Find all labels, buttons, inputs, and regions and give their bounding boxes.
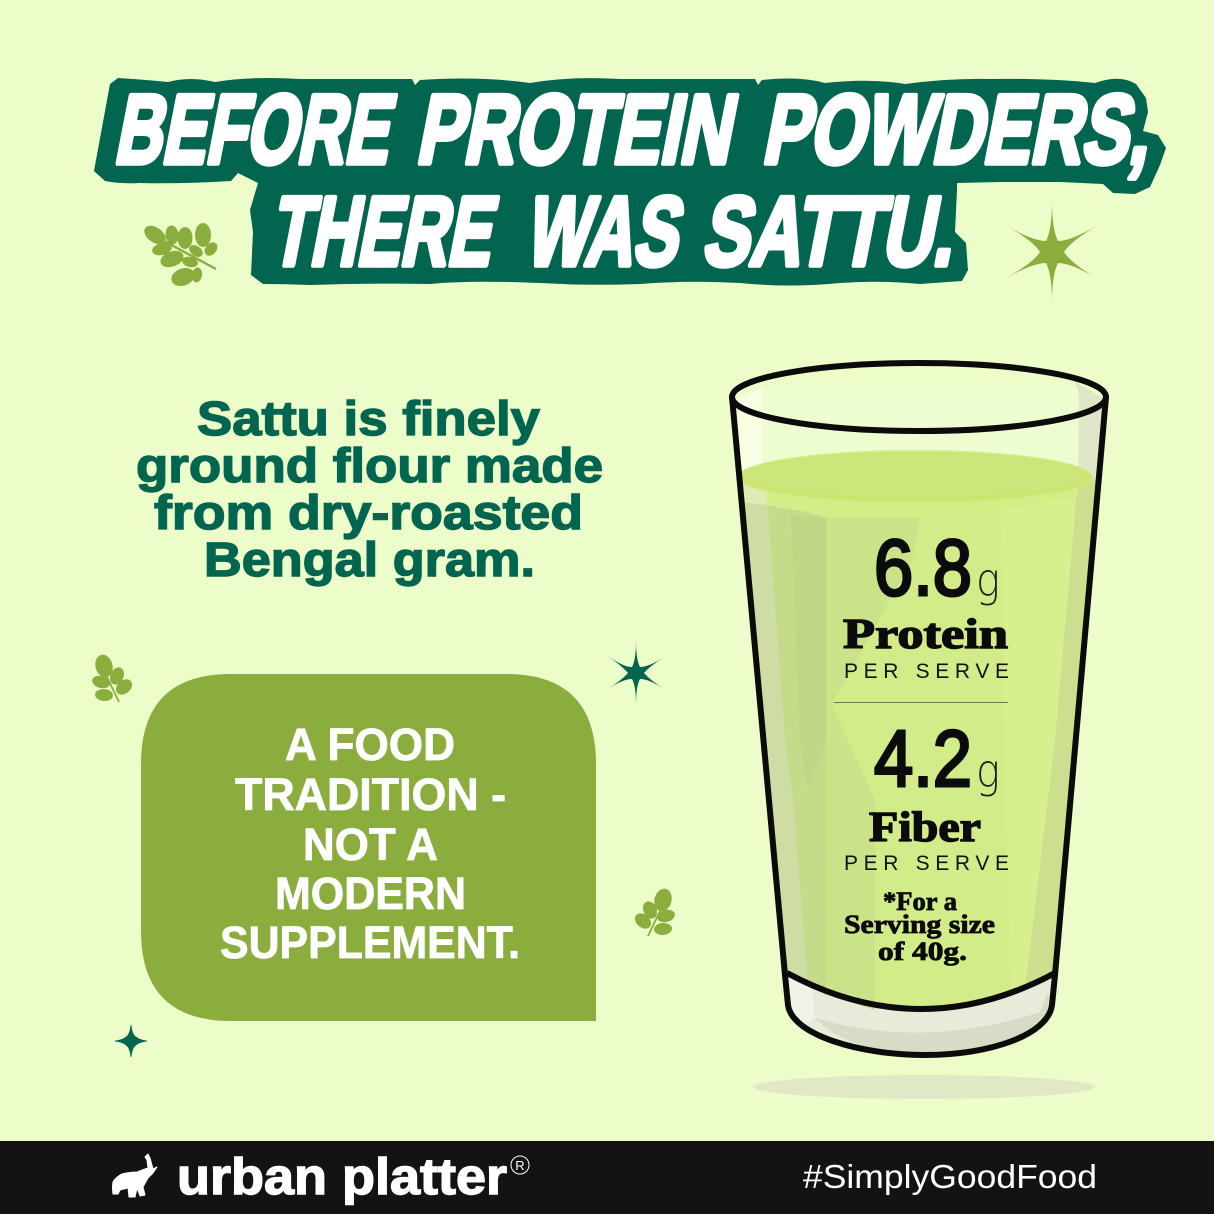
icon: leaf left (91, 653, 135, 702)
callout: A FOOD (285, 719, 455, 770)
title: THERE (265, 176, 506, 286)
liquid surface (737, 450, 1093, 504)
serving note (844, 887, 995, 966)
stat: fiber: Fiber (869, 805, 981, 851)
title: WAS (520, 176, 693, 286)
icon: six point dark sparkle (608, 640, 664, 705)
stat: protein: g (976, 553, 1000, 607)
intro text: ground flour made (136, 440, 603, 493)
icon: leaf sprig top (141, 222, 220, 289)
callout (141, 674, 596, 1021)
callout: NOT A (303, 819, 438, 870)
stat: protein (843, 523, 1009, 683)
logo wordmark: urban platter (177, 1148, 507, 1205)
registered mark (511, 1156, 529, 1174)
icon: leaf right (632, 887, 676, 936)
serving note: of 40g. (878, 937, 967, 966)
liquid body (740, 478, 1097, 1010)
intro text: Sattu is finely (197, 393, 540, 446)
footer bar (0, 1141, 1214, 1214)
stat: fiber: 4.2 (874, 714, 972, 803)
icon: elephant (112, 1154, 157, 1197)
registered mark: R (515, 1158, 525, 1173)
callout: MODERN (275, 868, 466, 919)
serving note: *For a (883, 887, 957, 916)
stat: fiber: g (976, 744, 1000, 798)
upper glass shading (735, 380, 1103, 482)
title: BEFORE (109, 74, 404, 184)
title: PROTEIN (411, 74, 746, 184)
stat: protein: 6.8 (874, 523, 972, 612)
hashtag: #SimplyGoodFood (803, 1158, 1097, 1195)
intro text: from dry-roasted (154, 487, 583, 540)
stat: fiber (844, 714, 1009, 875)
callout: TRADITION - (235, 769, 506, 820)
glass illustration (732, 363, 1106, 1055)
glass outline (732, 363, 1106, 1055)
glass base (787, 973, 1055, 1055)
icon: small sparkle (115, 1025, 147, 1057)
title (94, 74, 1166, 286)
stat: protein: Protein (843, 612, 1008, 658)
glass shadow (753, 1075, 1095, 1099)
stat: fiber: PER SERVE (844, 852, 1009, 875)
callout: SUPPLEMENT. (220, 917, 520, 968)
icon: six point sparkle (1006, 200, 1098, 303)
intro text (136, 393, 603, 587)
title: SATTU. (697, 176, 968, 286)
serving note: Serving size (844, 910, 995, 939)
stat: protein: PER SERVE (844, 660, 1009, 683)
intro text: Bengal gram. (204, 534, 535, 587)
